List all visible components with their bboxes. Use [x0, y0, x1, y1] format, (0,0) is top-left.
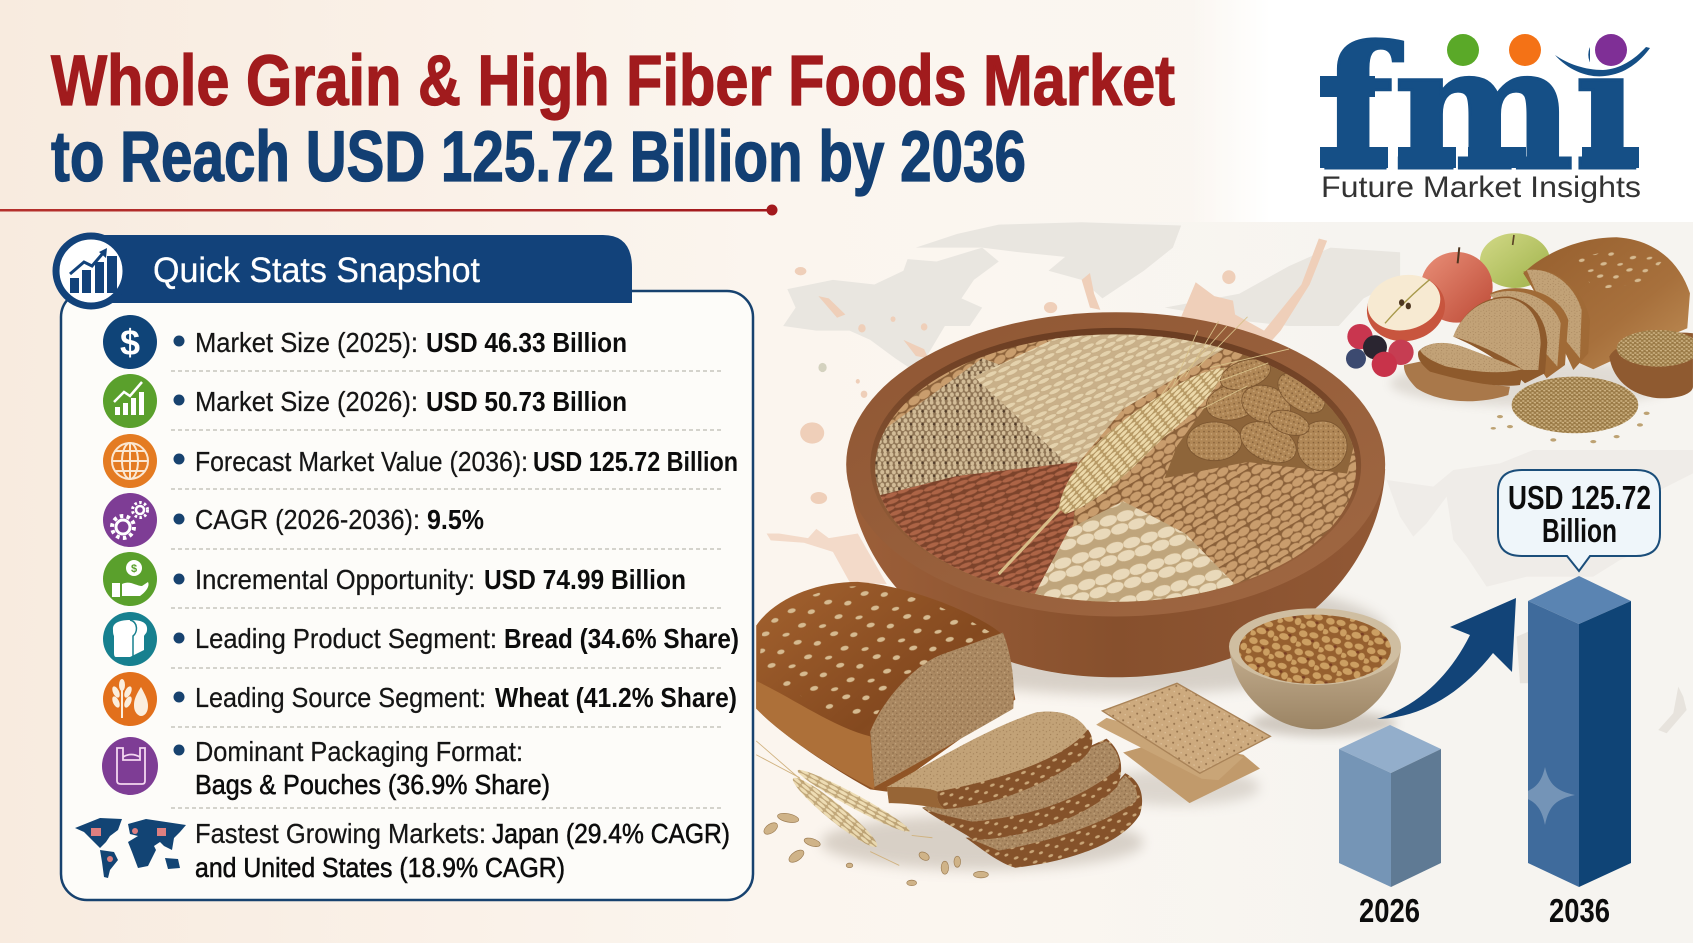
illustration: granola bowl: [1229, 608, 1401, 737]
row: leading product segment: [103, 612, 739, 666]
grains inside bowl: [866, 326, 1364, 612]
row: market size 2025: $: [120, 322, 140, 363]
axis label 2036: 2036: [1549, 892, 1610, 929]
row: leading source segment: Leading Source Segment:: [195, 682, 486, 713]
small wooden bowl: [1609, 330, 1693, 398]
row: incremental opportunity: [103, 552, 686, 606]
wheat ear on bowl: [999, 317, 1289, 574]
row: CAGR: [103, 493, 484, 547]
world map background east: [1387, 450, 1693, 733]
slice two: [922, 739, 1121, 840]
row: incremental opportunity: $: [131, 563, 137, 575]
slice one: [887, 712, 1092, 809]
loaf: [756, 582, 1015, 792]
bowl rim: [846, 312, 1385, 616]
callout: USD 125.72 Billion: Billion: [1542, 512, 1617, 549]
callout: USD 125.72 Billion: [1498, 470, 1660, 571]
row: dominant packaging format: Bags & Pouches (36.9% Share): [195, 769, 550, 800]
row: market size 2026: Market Size (2026):: [195, 386, 418, 417]
row: forecast market value: USD 125.72 Billion: [533, 446, 738, 477]
loaf with slices: [1404, 237, 1690, 401]
paint splashes: [767, 238, 1327, 584]
logo: Future Market Insights: Future Market Insights: [1321, 171, 1641, 204]
title divider: [0, 204, 778, 216]
bar 2036: [1528, 576, 1631, 887]
row: incremental opportunity: USD 74.99 Billion: [484, 564, 686, 595]
illustration: whole grain bowl: [846, 312, 1388, 695]
berries: [1346, 324, 1414, 377]
row: market size 2026: [103, 374, 627, 428]
title: Whole Grain & High Fiber Foods Market: [51, 42, 1175, 121]
row: forecast market value: Forecast Market Value (2036):: [195, 446, 528, 477]
apples: [1361, 233, 1550, 348]
row: leading product segment: Bread (34.6% Share): [504, 623, 739, 654]
heading text: Quick Stats Snapshot: [153, 251, 480, 290]
growth arrow: [1377, 598, 1516, 719]
row: leading source segment: [103, 672, 737, 726]
row: leading product segment: Leading Product Segment:: [195, 623, 497, 654]
row: dominant packaging format: Dominant Packaging Format:: [195, 736, 523, 767]
row: market size 2025: [103, 315, 627, 369]
logo: Future Market Insights: fmi: [1320, 9, 1639, 209]
row: fastest growing markets: [75, 818, 730, 883]
bar 2026: [1339, 725, 1441, 887]
icon: world map with flags: [75, 818, 186, 878]
row: fastest growing markets: Fastest Growing Markets:: [195, 818, 486, 849]
title: to Reach USD 125.72 Billion by 2036: [51, 118, 1026, 197]
row: fastest growing markets: Japan (29.4% CAGR): [492, 818, 730, 849]
illustration: apples, berries and sliced bread: [1346, 233, 1693, 443]
slices: [887, 712, 1142, 868]
illustration: bread loaf and slices: [756, 582, 1144, 886]
row: leading source segment: Wheat (41.2% Share): [495, 682, 737, 713]
panel: quick stats snapshot: [56, 235, 753, 900]
world map background: [783, 222, 1400, 372]
heading ribbon: [90, 235, 632, 303]
slice three: [966, 773, 1142, 868]
heading icon: rising chart: [56, 236, 126, 306]
row: market size 2025: Market Size (2025):: [195, 327, 418, 358]
illustration: crackers: [1094, 683, 1270, 805]
row: incremental opportunity: Incremental Opportunity:: [195, 564, 475, 595]
row: market size 2026: USD 50.73 Billion: [426, 386, 627, 417]
panel card: [61, 291, 753, 900]
grain pile: [1491, 377, 1650, 443]
bar chart: market growth: [1339, 470, 1660, 929]
row: market size 2025: USD 46.33 Billion: [426, 327, 627, 358]
title: [51, 42, 1175, 197]
wheat stalk beside bread: [756, 741, 932, 865]
scattered oats: [762, 812, 988, 886]
row: CAGR: 9.5%: [427, 504, 484, 535]
row: fastest growing markets: and United States (18.9% CAGR): [195, 852, 565, 883]
row: forecast market value: [103, 434, 738, 488]
callout: USD 125.72 Billion: USD 125.72: [1508, 479, 1651, 516]
axis label 2026: 2026: [1359, 892, 1420, 929]
row: dominant packaging format: [102, 736, 550, 800]
bowl body: [848, 469, 1385, 677]
row: CAGR: CAGR (2026-2036):: [195, 504, 420, 535]
